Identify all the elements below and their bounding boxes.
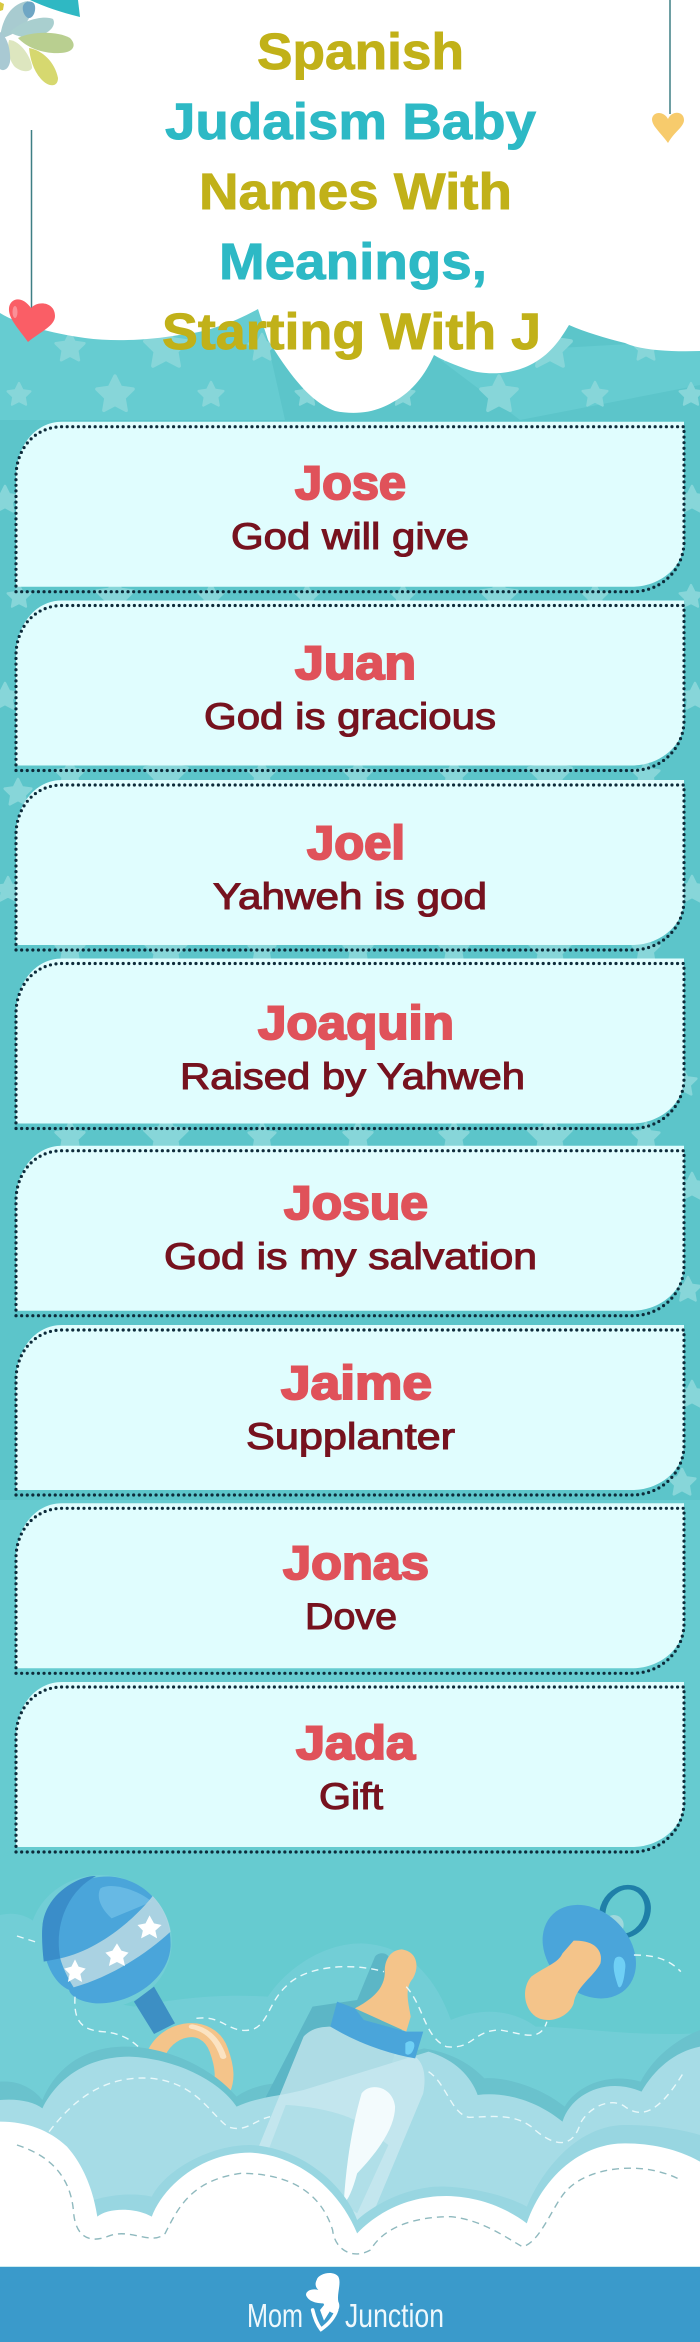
- bottle shadow: [237, 1953, 402, 2197]
- title: Judaism Baby: [165, 93, 537, 150]
- card: Jada: [16, 1682, 684, 1852]
- icon: hanging yellow heart: [652, 0, 684, 143]
- logo: MomJunction: [247, 2273, 444, 2334]
- meaning: Yahweh is god: Yahweh is god: [213, 876, 487, 917]
- title: Spanish: [257, 23, 464, 80]
- illustration: baby items and clouds: [0, 1875, 700, 2267]
- meaning: Raised by Yahweh: Raised by Yahweh: [180, 1056, 525, 1097]
- card: Jose: [16, 422, 684, 592]
- title: Starting With J: [162, 303, 541, 360]
- white cloud header: [0, 0, 700, 413]
- title: [162, 23, 541, 360]
- light cloud: [0, 2047, 700, 2267]
- card: Juan: [16, 600, 684, 770]
- icon: baby bottle: [257, 1949, 425, 2230]
- back cloud layer: [0, 1914, 700, 2267]
- icon: hanging red heart: [9, 130, 55, 342]
- name: Jose: Jose: [295, 456, 406, 509]
- icon: pacifier: [525, 1884, 653, 2020]
- inner cloud ring: [94, 2125, 700, 2267]
- logo text left: Mom: [247, 2297, 303, 2334]
- logo text right: Junction: [345, 2297, 444, 2334]
- name: Joaquin: Joaquin: [258, 996, 454, 1049]
- title: Meanings,: [219, 233, 487, 290]
- card: Jaime: [16, 1325, 684, 1495]
- name: Juan: Juan: [295, 636, 416, 689]
- meaning: Dove: Dove: [305, 1596, 397, 1637]
- name: Jaime: Jaime: [281, 1356, 432, 1409]
- name: Joel: Joel: [307, 816, 405, 869]
- title: Names With: [199, 163, 512, 220]
- card: Joel: [16, 780, 684, 950]
- meaning: God is my salvation: God is my salvation: [164, 1236, 537, 1277]
- icon: watercolor leaves: [0, 1, 74, 85]
- name: Josue: Josue: [284, 1176, 428, 1229]
- card: Josue: [16, 1146, 684, 1316]
- meaning: God will give: God will give: [231, 516, 469, 557]
- icon: rattle: [29, 1875, 224, 2090]
- corner pennant: [30, 0, 80, 17]
- dashed stitching: [17, 1936, 683, 2254]
- name: Jonas: Jonas: [283, 1536, 429, 1589]
- name: Jada: Jada: [296, 1716, 416, 1769]
- card: Joaquin: [16, 958, 684, 1128]
- mid shadow cloud: [0, 2030, 700, 2267]
- meaning: Supplanter: Supplanter: [246, 1416, 455, 1457]
- meaning: God is gracious: God is gracious: [204, 696, 496, 737]
- meaning: Gift: Gift: [319, 1776, 384, 1817]
- card: Jonas: [16, 1503, 684, 1673]
- white foreground cloud: [0, 2122, 700, 2267]
- footer bar: [0, 2267, 700, 2342]
- icon: mother and child silhouette: [306, 2273, 340, 2329]
